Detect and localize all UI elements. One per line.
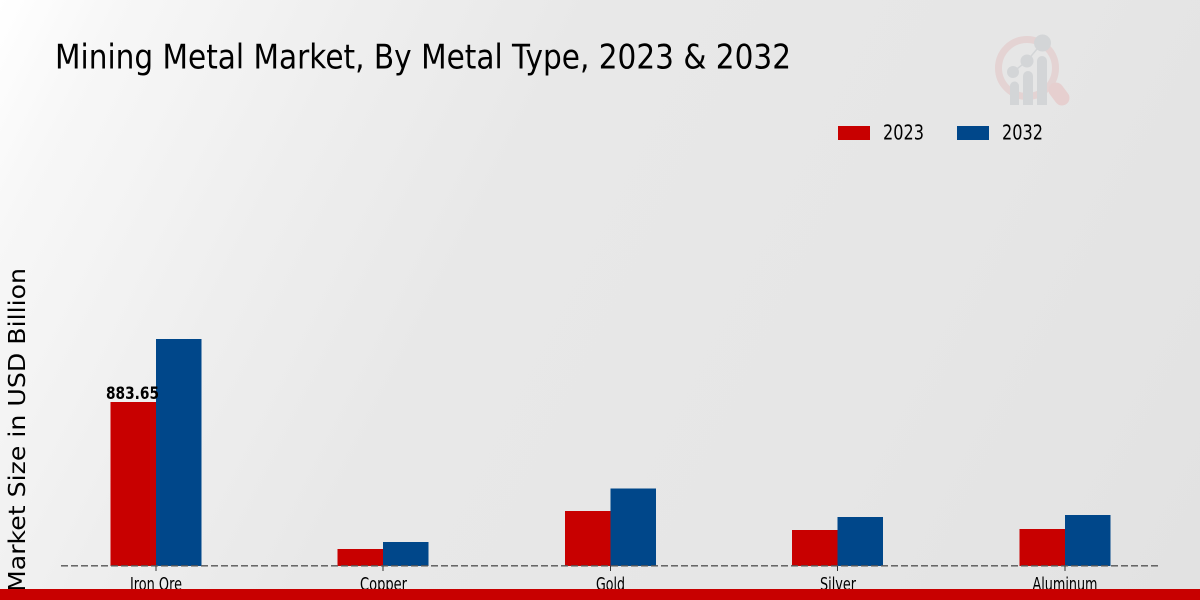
x-axis category labels: Iron Ore — [130, 574, 182, 595]
bars: Gold — [565, 488, 656, 566]
bar chart — [61, 339, 1159, 571]
legend item: 2032: 2032 — [1002, 120, 1043, 144]
bars: Silver — [792, 517, 883, 566]
legend item: 2023: 2023 — [883, 120, 924, 144]
x-axis category labels: Copper — [360, 574, 407, 595]
bars: Copper — [338, 542, 428, 566]
legend — [838, 120, 1043, 144]
x-axis category labels: Gold — [596, 574, 625, 595]
x-axis category labels — [130, 574, 1098, 595]
legend item: 2023 — [838, 120, 924, 144]
bars: Aluminum — [1020, 515, 1110, 566]
footer bar — [0, 589, 1200, 600]
x-axis category labels: Silver — [820, 574, 856, 595]
x-axis category labels: Aluminum — [1032, 574, 1098, 595]
icon: watermark logo magnifier with bars — [998, 34, 1062, 105]
value label: 883.65: 883.65 — [106, 384, 159, 403]
title: Mining Metal Market, By Metal Type, 2023 & 2032 — [55, 38, 791, 78]
y-axis label: Market Size in USD Billion — [3, 268, 31, 592]
legend item: 2032 — [957, 120, 1043, 144]
bars: Iron Ore — [110, 339, 202, 566]
